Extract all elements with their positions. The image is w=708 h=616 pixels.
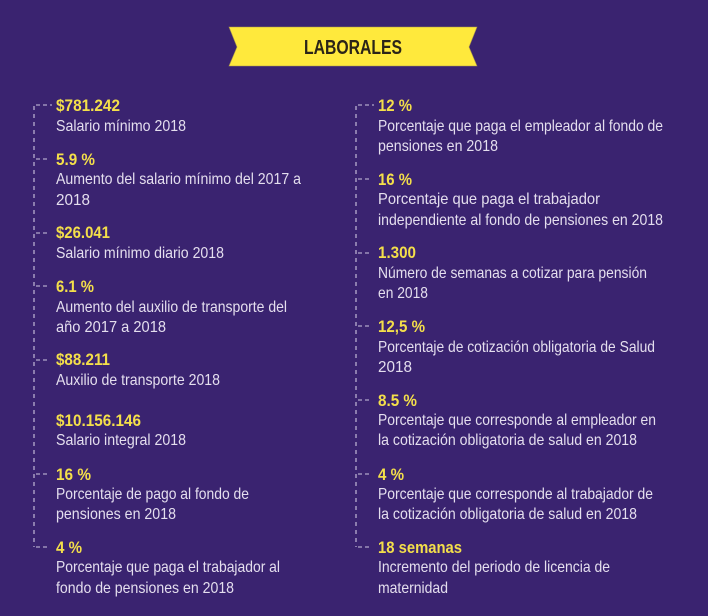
item: worker pension share: fondo de pensiones en 2018	[56, 580, 234, 597]
item: health contribution: Porcentaje de cotización obligatoria de Salud	[378, 339, 655, 356]
item: minimum wage	[56, 97, 186, 135]
item: minimum wage: $781.242	[56, 97, 120, 115]
item: health contribution: 12,5 %	[378, 318, 425, 336]
item: daily minimum wage: $26.041	[56, 224, 110, 242]
item: transport aid increase	[56, 278, 287, 336]
item: transport aid	[56, 351, 220, 389]
item: worker health share: la cotización obligatoria de salud en 2018	[378, 506, 637, 523]
item: daily minimum wage	[56, 224, 224, 262]
item: employer health share	[378, 392, 656, 449]
item: transport aid: $88.211	[56, 351, 110, 369]
item: employer pension share: pensiones en 2018	[378, 138, 498, 155]
item: minimum wage increase	[56, 151, 301, 209]
item: transport aid: Auxilio de transporte 2018	[56, 372, 220, 389]
right timeline connector	[356, 105, 374, 547]
item: integral salary: Salario integral 2018	[56, 432, 186, 449]
item: worker health share	[378, 466, 653, 523]
item: employer pension share: Porcentaje que paga el empleador al fondo de	[378, 118, 663, 135]
item: integral salary	[56, 412, 186, 449]
item: maternity leave: Incremento del periodo de licencia de	[378, 559, 610, 576]
item: independent worker pension share: independiente al fondo de pensiones en 2018	[378, 212, 663, 229]
item: pension fund payment: Porcentaje de pago al fondo de	[56, 486, 249, 503]
item: employer health share: 8.5 %	[378, 392, 417, 410]
item: pension weeks: 1.300	[378, 244, 416, 262]
item: minimum wage: Salario mínimo 2018	[56, 118, 186, 135]
item: pension weeks: Número de semanas a cotizar para pensión	[378, 265, 647, 282]
item: worker pension share: 4 %	[56, 539, 82, 557]
title ribbon: LABORALES	[304, 37, 402, 59]
item: transport aid increase: Aumento del auxilio de transporte del	[56, 299, 287, 316]
item: employer pension share	[378, 97, 663, 155]
item: integral salary: $10.156.146	[56, 412, 141, 430]
item: worker pension share: Porcentaje que paga el trabajador al	[56, 559, 280, 576]
item: employer pension share: 12 %	[378, 97, 412, 115]
item: minimum wage increase: 5.9 %	[56, 151, 95, 169]
item: worker pension share	[56, 539, 280, 597]
item: employer health share: Porcentaje que corresponde al empleador en	[378, 412, 656, 429]
item: daily minimum wage: Salario mínimo diario 2018	[56, 245, 224, 262]
item: transport aid increase: 6.1 %	[56, 278, 94, 296]
item: worker health share: 4 %	[378, 466, 404, 484]
item: pension fund payment: 16 %	[56, 466, 91, 484]
item: maternity leave: maternidad	[378, 580, 448, 597]
item: health contribution: 2018	[378, 359, 412, 376]
item: independent worker pension share	[378, 171, 663, 229]
right column	[378, 97, 663, 597]
left timeline connector	[34, 105, 52, 547]
left column	[56, 97, 301, 597]
item: maternity leave: 18 semanas	[378, 539, 462, 557]
item: pension weeks: en 2018	[378, 285, 428, 302]
item: minimum wage increase: 2018	[56, 192, 90, 209]
title ribbon	[229, 27, 477, 66]
item: minimum wage increase: Aumento del salario mínimo del 2017 a	[56, 171, 301, 188]
item: health contribution	[378, 318, 655, 376]
item: pension fund payment	[56, 466, 249, 523]
item: maternity leave	[378, 539, 610, 597]
item: pension weeks	[378, 244, 647, 302]
item: independent worker pension share: 16 %	[378, 171, 412, 189]
item: employer health share: la cotización obligatoria de salud en 2018	[378, 432, 637, 449]
item: worker health share: Porcentaje que corresponde al trabajador de	[378, 486, 653, 503]
item: independent worker pension share: Porcentaje que paga el trabajador	[378, 191, 601, 208]
item: transport aid increase: año 2017 a 2018	[56, 319, 166, 336]
item: pension fund payment: pensiones en 2018	[56, 506, 176, 523]
